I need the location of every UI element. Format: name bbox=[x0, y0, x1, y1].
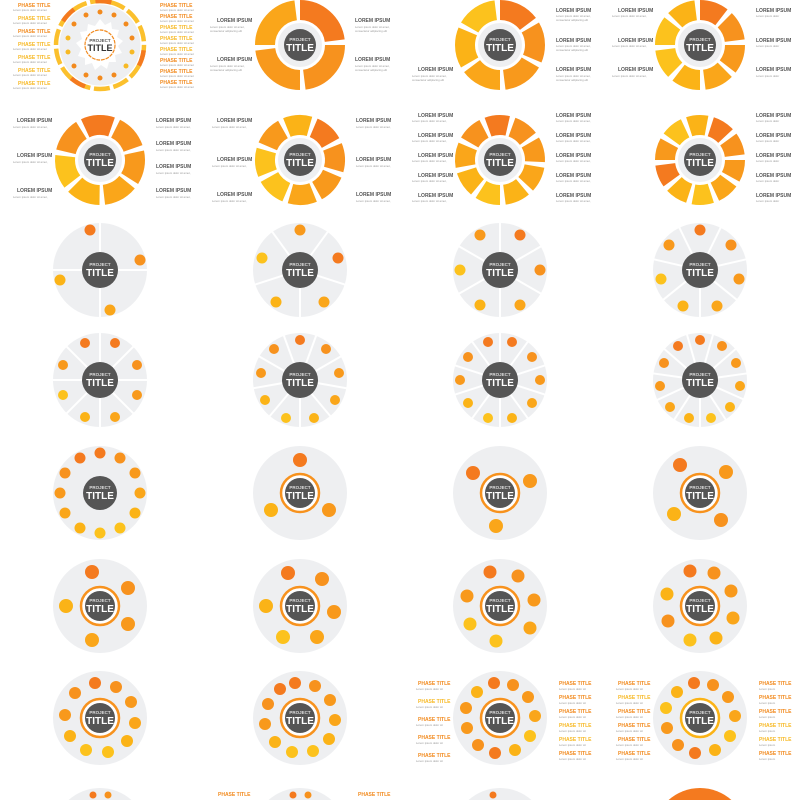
text blocks r2c3: LOREM IPSUM bbox=[418, 193, 453, 199]
text blocks r2c3: Lorem ipsum dolor sit amet, bbox=[556, 159, 591, 163]
wheel r5c2 bbox=[253, 446, 347, 540]
wheel r4c4: PROJECT bbox=[689, 372, 711, 377]
phase titles right r1c1: PHASE TITLE bbox=[160, 36, 193, 42]
phase titles right r1c1: Lorem ipsum dolor sit amet bbox=[160, 19, 194, 23]
text blocks r1c3 bbox=[412, 8, 591, 82]
phase titles r7c3 and r7c4: PHASE TITLE bbox=[418, 681, 451, 687]
phase titles r7c3 and r7c4: PHASE TITLE bbox=[618, 751, 651, 757]
phase titles r7c3 and r7c4: Lorem ipsum bbox=[759, 715, 776, 719]
phase titles left r1c1: Lorem ipsum dolor sit amet bbox=[13, 60, 47, 64]
phase titles left r1c1: Lorem ipsum dolor sit amet bbox=[13, 86, 47, 90]
diagram r2c3: 9 segment ring: TITLE bbox=[486, 158, 514, 169]
text blocks r1c3: LOREM IPSUM bbox=[418, 67, 453, 73]
wheel r7c2: PROJECT bbox=[289, 710, 311, 715]
text blocks r1c4: LOREM IPSUM bbox=[756, 67, 791, 73]
wheel r6c3: PROJECT bbox=[489, 598, 511, 603]
diagram r1c2: 4 segment ring bbox=[265, 10, 335, 80]
text blocks r2c2: Lorem ipsum dolor sit amet, bbox=[356, 125, 391, 129]
wheel r4c1: TITLE bbox=[86, 378, 114, 389]
text blocks r1c4: LOREM IPSUM bbox=[756, 38, 791, 44]
text blocks r1c2: consectetur adipiscing elit bbox=[355, 29, 387, 33]
text blocks r1c2: LOREM IPSUM bbox=[217, 57, 252, 63]
phase titles r7c3 and r7c4: Lorem ipsum dolor sit bbox=[416, 705, 443, 709]
phase titles r7c3 and r7c4: Lorem ipsum bbox=[759, 729, 776, 733]
text blocks r2c3: Lorem ipsum dolor sit amet, bbox=[412, 159, 447, 163]
diagram r2c3: 9 segment ring bbox=[455, 115, 545, 205]
wheel r7c2 bbox=[253, 671, 347, 765]
diagram r2c1: 7 segment ring: TITLE bbox=[86, 158, 114, 169]
phase titles left r1c1: PHASE TITLE bbox=[18, 81, 51, 87]
phase titles r7c3 and r7c4: PHASE TITLE bbox=[559, 695, 592, 701]
diagram r1c4: 8 segment ring bbox=[665, 10, 735, 80]
wheel r4c1 bbox=[52, 332, 148, 428]
text blocks r2c2: LOREM IPSUM bbox=[217, 192, 252, 198]
phase titles right r1c1: Lorem ipsum dolor sit amet bbox=[160, 74, 194, 78]
wheel r7c1: PROJECT bbox=[89, 710, 111, 715]
wheel r6c2 bbox=[253, 559, 347, 653]
text blocks r2c4: LOREM IPSUM bbox=[756, 133, 791, 139]
phase titles r7c3 and r7c4: PHASE TITLE bbox=[418, 753, 451, 759]
wheel r3c3 bbox=[453, 222, 547, 318]
phase titles r7c3 and r7c4: Lorem ipsum dolor sit bbox=[616, 715, 643, 719]
text blocks r2c1: Lorem ipsum dolor sit amet, bbox=[156, 148, 191, 152]
text blocks r2c4: LOREM IPSUM bbox=[756, 173, 791, 179]
text blocks r2c3: Lorem ipsum dolor sit amet, bbox=[556, 139, 591, 143]
wheel r3c1: PROJECT bbox=[89, 262, 111, 267]
diagram r2c4: 10 segment ring bbox=[656, 116, 744, 204]
phase titles r7c3 and r7c4: PHASE TITLE bbox=[618, 723, 651, 729]
text blocks r1c3: Lorem ipsum dolor sit amet, bbox=[556, 14, 591, 18]
phase titles r7c3 and r7c4: Lorem ipsum dolor sit bbox=[559, 687, 586, 691]
phase titles r7c3 and r7c4: PHASE TITLE bbox=[559, 709, 592, 715]
phase titles r7c3 and r7c4: Lorem ipsum dolor sit bbox=[559, 715, 586, 719]
diagram r2c2: 8 segment ring: TITLE bbox=[286, 158, 314, 169]
wheel r5c4 bbox=[653, 446, 747, 540]
text blocks r1c4: Lorem ipsum dolor bbox=[756, 14, 779, 18]
wheel r5c2: PROJECT bbox=[289, 485, 311, 490]
wheel r3c2: PROJECT bbox=[289, 262, 311, 267]
phase titles r7c3 and r7c4: Lorem ipsum dolor sit bbox=[416, 741, 443, 745]
phase titles r7c3 and r7c4: PHASE TITLE bbox=[759, 723, 792, 729]
diagram r1c2: 4 segment ring: PROJECT bbox=[289, 37, 311, 42]
phase titles r7c3 and r7c4: Lorem ipsum dolor sit bbox=[616, 757, 643, 761]
diagram r2c2: 8 segment ring: PROJECT bbox=[289, 152, 311, 157]
phase titles r7c3 and r7c4: PHASE TITLE bbox=[759, 751, 792, 757]
phase titles r7c3 and r7c4: PHASE TITLE bbox=[559, 737, 592, 743]
phase titles left r1c1: PHASE TITLE bbox=[18, 16, 51, 22]
phase titles right r1c1 bbox=[160, 3, 194, 89]
wheel r3c1 bbox=[52, 222, 148, 318]
phase titles r7c3 and r7c4: Lorem ipsum bbox=[759, 701, 776, 705]
wheel r3c2: TITLE bbox=[286, 268, 314, 279]
phase titles r7c3 and r7c4: PHASE TITLE bbox=[559, 751, 592, 757]
wheel r7c4 bbox=[653, 671, 747, 765]
phase titles r7c3 and r7c4: Lorem ipsum bbox=[759, 757, 776, 761]
phase titles right r1c1: PHASE TITLE bbox=[160, 25, 193, 31]
wheel r6c3 bbox=[453, 559, 547, 653]
phase titles r7c3 and r7c4: PHASE TITLE bbox=[618, 709, 651, 715]
text blocks r1c4: Lorem ipsum dolor sit amet, bbox=[612, 44, 647, 48]
text blocks r1c3: consectetur adipiscing elit bbox=[412, 78, 444, 82]
phase titles left r1c1: PHASE TITLE bbox=[18, 55, 51, 61]
text blocks r2c3: Lorem ipsum dolor sit amet, bbox=[556, 199, 591, 203]
text blocks r1c3: consectetur adipiscing elit bbox=[556, 78, 588, 82]
phase titles right r1c1: PHASE TITLE bbox=[160, 47, 193, 53]
text blocks r2c4: Lorem ipsum dolor bbox=[756, 159, 779, 163]
phase titles r7c3 and r7c4: Lorem ipsum dolor sit bbox=[416, 687, 443, 691]
text blocks r2c2: Lorem ipsum dolor sit amet, bbox=[356, 164, 391, 168]
text blocks r2c3 bbox=[412, 113, 591, 203]
phase titles left r1c1: Lorem ipsum dolor sit amet bbox=[13, 8, 47, 12]
text blocks r1c3: Lorem ipsum dolor sit amet, bbox=[556, 44, 591, 48]
phase titles right r1c1: Lorem ipsum dolor sit amet bbox=[160, 85, 194, 89]
text blocks r2c1: LOREM IPSUM bbox=[156, 141, 191, 147]
phase titles r7c3 and r7c4: PHASE TITLE bbox=[618, 737, 651, 743]
text blocks r2c3: Lorem ipsum dolor sit amet, bbox=[412, 119, 447, 123]
phase titles r7c3 and r7c4: Lorem ipsum bbox=[759, 743, 776, 747]
text blocks r1c4 bbox=[612, 8, 791, 78]
phase titles left r1c1: PHASE TITLE bbox=[18, 29, 51, 35]
phase titles left r1c1: PHASE TITLE bbox=[18, 3, 51, 9]
text blocks r1c2: consectetur adipiscing elit bbox=[210, 68, 242, 72]
text blocks r2c1: Lorem ipsum dolor sit amet, bbox=[13, 160, 48, 164]
text blocks r2c3: Lorem ipsum dolor sit amet, bbox=[556, 119, 591, 123]
text blocks r1c2: Lorem ipsum dolor sit amet, bbox=[210, 25, 245, 29]
text blocks r1c3: Lorem ipsum dolor sit amet, bbox=[412, 74, 447, 78]
text blocks r1c2: LOREM IPSUM bbox=[217, 18, 252, 24]
wheel r4c2: TITLE bbox=[286, 378, 314, 389]
phase titles right r1c1: PHASE TITLE bbox=[160, 3, 193, 9]
phase titles r7c3 and r7c4 bbox=[218, 681, 792, 798]
phase titles right r1c1: PHASE TITLE bbox=[160, 69, 193, 75]
text blocks r1c2: LOREM IPSUM bbox=[355, 57, 390, 63]
text blocks r1c3: consectetur adipiscing elit bbox=[556, 48, 588, 52]
text blocks r1c2 bbox=[210, 18, 390, 72]
diagram r2c2: 8 segment ring bbox=[254, 114, 346, 206]
phase titles left r1c1: Lorem ipsum dolor sit amet bbox=[13, 73, 47, 77]
wheel r4c3 bbox=[453, 332, 547, 428]
text blocks r1c2: consectetur adipiscing elit bbox=[210, 29, 242, 33]
wheel r4c4 bbox=[652, 333, 748, 428]
text blocks r2c2: LOREM IPSUM bbox=[356, 192, 391, 198]
wheel r3c4 bbox=[653, 223, 747, 318]
text blocks r2c2: Lorem ipsum dolor sit amet, bbox=[212, 199, 247, 203]
text blocks r1c2: consectetur adipiscing elit bbox=[355, 68, 387, 72]
text blocks r2c2: LOREM IPSUM bbox=[217, 118, 252, 124]
phase titles left r1c1: Lorem ipsum dolor sit amet bbox=[13, 34, 47, 38]
text blocks r1c4: LOREM IPSUM bbox=[618, 8, 653, 14]
diagram r2c4: 10 segment ring: PROJECT bbox=[689, 152, 711, 157]
text blocks r2c1: Lorem ipsum dolor sit amet, bbox=[156, 195, 191, 199]
wheel r6c1 bbox=[53, 559, 147, 653]
gray wheel diagrams rows 5-8 with ring bbox=[53, 446, 747, 800]
text blocks r2c1: LOREM IPSUM bbox=[17, 153, 52, 159]
text blocks r2c1: LOREM IPSUM bbox=[156, 164, 191, 170]
wheel r5c3: TITLE bbox=[486, 491, 514, 502]
text blocks r2c1: Lorem ipsum dolor sit amet, bbox=[156, 125, 191, 129]
phase titles r7c3 and r7c4: Lorem ipsum dolor sit bbox=[616, 701, 643, 705]
wheel r3c3: PROJECT bbox=[489, 262, 511, 267]
phase titles r7c3 and r7c4: Lorem ipsum bbox=[759, 687, 776, 691]
wheel r6c3: TITLE bbox=[486, 604, 514, 615]
text blocks r2c2: Lorem ipsum dolor sit amet, bbox=[212, 125, 247, 129]
text blocks r2c4: LOREM IPSUM bbox=[756, 153, 791, 159]
wheel r3c4: TITLE bbox=[686, 268, 714, 279]
text blocks r1c2: LOREM IPSUM bbox=[355, 18, 390, 24]
wheel r7c4: TITLE bbox=[686, 716, 714, 727]
phase titles left r1c1: Lorem ipsum dolor sit amet bbox=[13, 47, 47, 51]
phase titles right r1c1: Lorem ipsum dolor sit amet bbox=[160, 8, 194, 12]
wheel r6c4: TITLE bbox=[686, 604, 714, 615]
text blocks r2c1: Lorem ipsum dolor sit amet, bbox=[13, 125, 48, 129]
phase titles r7c3 and r7c4: PHASE TITLE bbox=[759, 695, 792, 701]
wheel r6c2: TITLE bbox=[286, 604, 314, 615]
text blocks r2c2 bbox=[212, 118, 391, 203]
wheel r4c2: PROJECT bbox=[289, 372, 311, 377]
diagram r2c1: 7 segment ring: PROJECT bbox=[89, 152, 111, 157]
text blocks r2c4: Lorem ipsum dolor bbox=[756, 179, 779, 183]
text blocks r1c2: Lorem ipsum dolor sit amet, bbox=[355, 64, 390, 68]
diagram r1c1: sunburst phase wheel: TITLE bbox=[88, 43, 112, 53]
text blocks r2c1 bbox=[13, 118, 191, 199]
phase titles r7c3 and r7c4: PHASE TITLE bbox=[559, 681, 592, 687]
text blocks r1c4: LOREM IPSUM bbox=[756, 8, 791, 14]
text blocks r2c4 bbox=[756, 113, 791, 203]
diagram r1c3: 6 segment ring bbox=[465, 10, 535, 80]
wheel r5c3: PROJECT bbox=[489, 485, 511, 490]
text blocks r2c3: Lorem ipsum dolor sit amet, bbox=[412, 179, 447, 183]
diagram r1c2: 4 segment ring: TITLE bbox=[286, 43, 314, 54]
text blocks r2c4: Lorem ipsum dolor bbox=[756, 139, 779, 143]
text blocks r1c4: Lorem ipsum dolor bbox=[756, 74, 779, 78]
wheel r5c3 bbox=[453, 446, 547, 540]
text blocks r2c3: LOREM IPSUM bbox=[418, 133, 453, 139]
phase titles right r1c1: Lorem ipsum dolor sit amet bbox=[160, 30, 194, 34]
text blocks r2c2: Lorem ipsum dolor sit amet, bbox=[212, 164, 247, 168]
phase titles left r1c1: Lorem ipsum dolor sit amet bbox=[13, 21, 47, 25]
diagram r1c1: sunburst phase wheel bbox=[52, 0, 148, 93]
text blocks r2c4: Lorem ipsum dolor bbox=[756, 199, 779, 203]
wheel r7c3 bbox=[453, 671, 547, 765]
text blocks r2c3: LOREM IPSUM bbox=[556, 193, 591, 199]
diagram r1c4: 8 segment ring: PROJECT bbox=[689, 37, 711, 42]
phase titles r7c3 and r7c4: Lorem ipsum dolor sit bbox=[416, 723, 443, 727]
text blocks r2c1: Lorem ipsum dolor sit amet, bbox=[156, 171, 191, 175]
wheels row 8 partial bbox=[69, 788, 731, 800]
text blocks r1c4: Lorem ipsum dolor bbox=[756, 44, 779, 48]
text blocks r2c3: LOREM IPSUM bbox=[556, 153, 591, 159]
phase titles right r1c1: Lorem ipsum dolor sit amet bbox=[160, 63, 194, 67]
phase titles left r1c1 bbox=[13, 3, 51, 90]
text blocks r1c3: LOREM IPSUM bbox=[556, 8, 591, 14]
phase titles right r1c1: PHASE TITLE bbox=[160, 14, 193, 20]
text blocks r2c2: LOREM IPSUM bbox=[356, 157, 391, 163]
text blocks r2c2: LOREM IPSUM bbox=[217, 157, 252, 163]
phase titles r7c3 and r7c4: PHASE TITLE bbox=[618, 681, 651, 687]
wheel r5c1 bbox=[53, 446, 147, 540]
text blocks r2c2: Lorem ipsum dolor sit amet, bbox=[356, 199, 391, 203]
text blocks r2c2: LOREM IPSUM bbox=[356, 118, 391, 124]
wheel r7c2: TITLE bbox=[286, 716, 314, 727]
wheel r6c1: PROJECT bbox=[89, 598, 111, 603]
text blocks r1c3: consectetur adipiscing elit bbox=[556, 18, 588, 22]
wheel r4c1: PROJECT bbox=[89, 372, 111, 377]
text blocks r2c3: Lorem ipsum dolor sit amet, bbox=[412, 139, 447, 143]
text blocks r2c3: LOREM IPSUM bbox=[556, 173, 591, 179]
phase titles right r1c1: PHASE TITLE bbox=[160, 80, 193, 86]
wheel r4c3: PROJECT bbox=[489, 372, 511, 377]
phase titles r7c3 and r7c4: Lorem ipsum dolor sit bbox=[416, 759, 443, 763]
wheel r3c2 bbox=[253, 223, 347, 318]
phase titles r7c3 and r7c4: PHASE TITLE bbox=[618, 695, 651, 701]
wheel r5c4: TITLE bbox=[686, 491, 714, 502]
text blocks r1c4: LOREM IPSUM bbox=[618, 67, 653, 73]
wheel r7c1 bbox=[53, 671, 147, 765]
diagram r2c4: 10 segment ring: TITLE bbox=[686, 158, 714, 169]
wheel r6c2: PROJECT bbox=[289, 598, 311, 603]
diagram r1c1: sunburst phase wheel: PROJECT bbox=[89, 38, 111, 43]
text blocks r2c3: LOREM IPSUM bbox=[556, 133, 591, 139]
phase titles r7c3 and r7c4: PHASE TITLE bbox=[418, 735, 451, 741]
wheel r7c4: PROJECT bbox=[689, 710, 711, 715]
text blocks r1c4: LOREM IPSUM bbox=[618, 38, 653, 44]
text blocks r2c3: LOREM IPSUM bbox=[556, 113, 591, 119]
text blocks r2c1: LOREM IPSUM bbox=[17, 118, 52, 124]
text blocks r2c4: LOREM IPSUM bbox=[756, 113, 791, 119]
text blocks r2c4: Lorem ipsum dolor bbox=[756, 119, 779, 123]
phase titles r7c3 and r7c4: Lorem ipsum dolor sit bbox=[616, 729, 643, 733]
wheel r6c4: PROJECT bbox=[689, 598, 711, 603]
diagram r1c3: 6 segment ring: PROJECT bbox=[489, 37, 511, 42]
diagram r1c4: 8 segment ring: TITLE bbox=[686, 43, 714, 54]
phase titles r7c3 and r7c4: Lorem ipsum dolor sit bbox=[559, 729, 586, 733]
gray wheel diagrams rows 3-4 bbox=[52, 222, 748, 428]
phase titles left r1c1: PHASE TITLE bbox=[18, 68, 51, 74]
wheel r7c3: PROJECT bbox=[489, 710, 511, 715]
wheel r5c2: TITLE bbox=[286, 491, 314, 502]
text blocks r1c4: Lorem ipsum dolor sit amet, bbox=[612, 14, 647, 18]
diagram r1c3: 6 segment ring: TITLE bbox=[486, 43, 514, 54]
diagram r2c1: 7 segment ring bbox=[53, 113, 147, 207]
phase titles r7c3 and r7c4: PHASE TITLE bbox=[418, 699, 451, 705]
phase titles r7c3 and r7c4: Lorem ipsum dolor sit bbox=[616, 687, 643, 691]
text blocks r2c3: Lorem ipsum dolor sit amet, bbox=[412, 199, 447, 203]
text blocks r2c4: LOREM IPSUM bbox=[756, 193, 791, 199]
phase titles r7c3 and r7c4: Lorem ipsum dolor sit bbox=[616, 743, 643, 747]
wheel r3c1: TITLE bbox=[86, 268, 114, 279]
wheel r5c1: TITLE bbox=[86, 491, 114, 502]
phase titles r7c3 and r7c4: PHASE TITLE bbox=[218, 792, 251, 798]
text blocks r2c1: LOREM IPSUM bbox=[17, 188, 52, 194]
phase titles r7c3 and r7c4: PHASE TITLE bbox=[759, 737, 792, 743]
text blocks r1c3: Lorem ipsum dolor sit amet, bbox=[556, 74, 591, 78]
phase titles r7c3 and r7c4: Lorem ipsum dolor sit bbox=[559, 743, 586, 747]
wheel r5c4: PROJECT bbox=[689, 485, 711, 490]
text blocks r1c3: LOREM IPSUM bbox=[556, 38, 591, 44]
wheel r7c1: TITLE bbox=[86, 716, 114, 727]
phase titles right r1c1: Lorem ipsum dolor sit amet bbox=[160, 52, 194, 56]
text blocks r2c1: LOREM IPSUM bbox=[156, 188, 191, 194]
text blocks r2c3: LOREM IPSUM bbox=[418, 173, 453, 179]
phase titles right r1c1: Lorem ipsum dolor sit amet bbox=[160, 41, 194, 45]
text blocks r1c3: LOREM IPSUM bbox=[556, 67, 591, 73]
wheel r7c3: TITLE bbox=[486, 716, 514, 727]
wheel r4c3: TITLE bbox=[486, 378, 514, 389]
wheel r4c4: TITLE bbox=[686, 378, 714, 389]
diagram r2c3: 9 segment ring: PROJECT bbox=[489, 152, 511, 157]
wheel r3c3: TITLE bbox=[486, 268, 514, 279]
text blocks r2c3: LOREM IPSUM bbox=[418, 153, 453, 159]
text blocks r2c3: Lorem ipsum dolor sit amet, bbox=[556, 179, 591, 183]
phase titles r7c3 and r7c4: PHASE TITLE bbox=[759, 709, 792, 715]
phase titles r7c3 and r7c4: PHASE TITLE bbox=[559, 723, 592, 729]
text blocks r2c3: LOREM IPSUM bbox=[418, 113, 453, 119]
text blocks r1c2: Lorem ipsum dolor sit amet, bbox=[210, 64, 245, 68]
wheel r6c4 bbox=[653, 559, 747, 653]
phase titles right r1c1: PHASE TITLE bbox=[160, 58, 193, 64]
wheel r4c2 bbox=[253, 333, 347, 428]
wheel r6c1: TITLE bbox=[86, 604, 114, 615]
text blocks r1c2: Lorem ipsum dolor sit amet, bbox=[355, 25, 390, 29]
phase titles left r1c1: PHASE TITLE bbox=[18, 42, 51, 48]
phase titles r7c3 and r7c4: PHASE TITLE bbox=[759, 681, 792, 687]
wheel r3c4: PROJECT bbox=[689, 262, 711, 267]
wheel r5c1: PROJECT bbox=[89, 485, 111, 490]
text blocks r1c4: Lorem ipsum dolor sit amet, bbox=[612, 74, 647, 78]
phase titles r7c3 and r7c4: Lorem ipsum dolor sit bbox=[559, 757, 586, 761]
phase titles r7c3 and r7c4: Lorem ipsum dolor sit bbox=[559, 701, 586, 705]
phase titles r7c3 and r7c4: PHASE TITLE bbox=[358, 792, 391, 798]
phase titles r7c3 and r7c4: PHASE TITLE bbox=[418, 717, 451, 723]
text blocks r2c1: LOREM IPSUM bbox=[156, 118, 191, 124]
text blocks r2c1: Lorem ipsum dolor sit amet, bbox=[13, 195, 48, 199]
